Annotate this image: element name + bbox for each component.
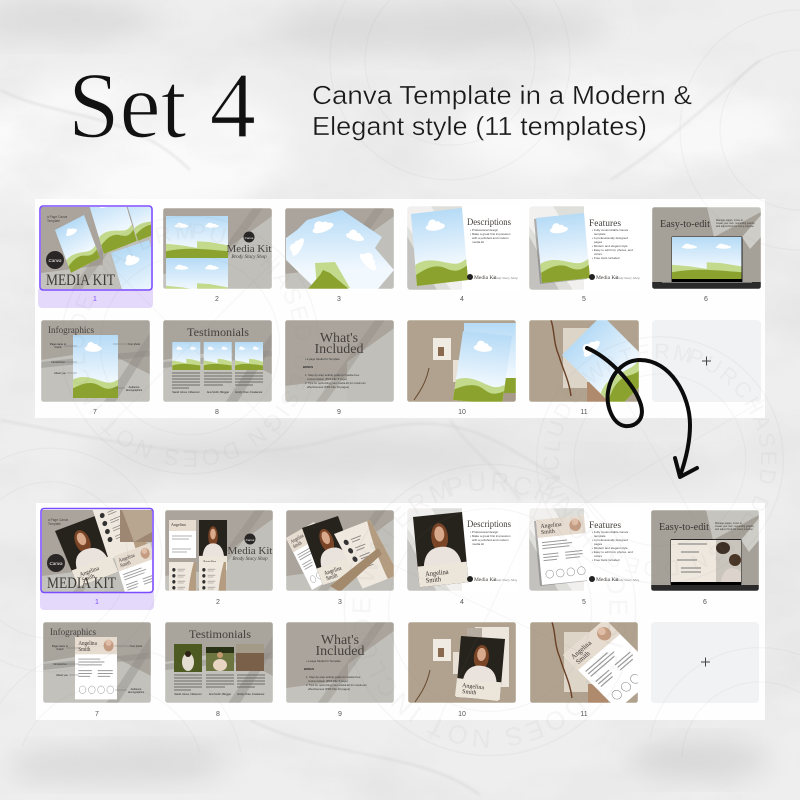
slide 9: what's included (284, 320, 397, 406)
slide 8: testimonials: Emily Chan, Freelancer (235, 390, 263, 394)
slide 4: descriptions with photo: media kit (472, 542, 484, 546)
slide 7: infographics: Introduction (51, 360, 65, 364)
panel: placeholder template grid (35, 185, 765, 418)
slide 2: media kit pages: Canva (245, 236, 254, 240)
number 5: 5 (582, 599, 586, 606)
slide 5: features with resume card (528, 508, 640, 592)
slide 7: infographics with resume: demographics (128, 690, 145, 694)
slide 4: descriptions with photo: • Make a great first impression (470, 534, 511, 538)
slide 9: what's included: effectiveness (PDF File 10 pages) (308, 687, 350, 691)
slide 5: features: • Fully customizable Canva (592, 228, 628, 232)
number 3: 3 (337, 296, 341, 303)
slide 5: features with resume card: colors (594, 554, 603, 558)
slide 6: easy to edit laptop (652, 206, 762, 290)
slide 9: what's included: customization (PDF File 3 page) (308, 679, 348, 683)
slide 4: descriptions with photo: Media Kit (474, 577, 497, 583)
slide 4: descriptions with photo: Brody Stacy Shop (493, 578, 518, 582)
slide 5: features with resume card: • A professionally designed (592, 538, 628, 542)
slide 2: media kit pages with photo: Angelina (171, 522, 186, 527)
slide 7: infographics (40, 320, 153, 406)
slide 8: testimonials: Ana Smith, Blogger (207, 390, 229, 394)
slide 7: infographics with resume: Your photo (130, 644, 143, 648)
slide 7: infographics: Audience (129, 385, 140, 389)
slide 2: media kit pages: Brody Stacy Shop (231, 255, 267, 260)
slide 4: descriptions (406, 206, 518, 290)
slide 10: sand flat lay with photo (408, 622, 520, 708)
slide 10: sand flat lay with photo: Smith (462, 689, 477, 696)
slide 5: features: Media Kit (596, 275, 619, 281)
slide 5: features: • Modern and elegant style (592, 244, 628, 248)
slide 1: media kit cover with photo: MEDIA KIT (47, 575, 116, 592)
add-page tile (652, 320, 761, 402)
slide 4: descriptions: • Professional design (470, 228, 498, 232)
slide 4: descriptions: Brody Stacy Shop (493, 276, 518, 280)
slide 9: what's included: • a page Media Kit Template (306, 659, 341, 663)
slide 11: tilted card (528, 315, 657, 410)
slide 11: tilted resume (530, 619, 660, 710)
slide 4: descriptions: Descriptions (467, 218, 511, 228)
title: Set 4 (68, 54, 256, 158)
slide 7: infographics: Page name or (50, 342, 66, 346)
slide 4: descriptions: with a polished and modern (472, 236, 509, 240)
slide 5: features with resume card: • Free fonts included (592, 558, 620, 562)
slide 9: what's included: BONUS (304, 667, 314, 671)
slide 2: media kit pages: Media Kit (227, 243, 271, 255)
slide 5: features: Features (589, 219, 621, 229)
slide 8: testimonials with photos: Ana Smith, Blogger (209, 692, 231, 696)
slide 5: features: • Easy to edit font, photos, and (592, 248, 633, 252)
slide 9: what's included: Included (315, 342, 363, 357)
number 6: 6 (704, 296, 708, 303)
number 1: 1 (93, 296, 97, 303)
slide 1: media kit cover with photo (41, 492, 167, 612)
subtitle: Canva Template in a Modern & (312, 80, 692, 110)
slide 9: what's included: 1. Step-by-step setting guide for hassle-free (305, 373, 360, 377)
slide 6: laptop with page (650, 510, 760, 592)
slide 7: infographics with resume (42, 622, 155, 708)
slide 1: media kit cover with photo: a Page Canva (48, 518, 68, 522)
slide 6: easy to edit laptop: Easy-to-edit (660, 219, 710, 230)
slide 5: features: • A professionally designed (592, 236, 628, 240)
slide 9: what's included: 2. Tips for optimizing your media kit for maximum (306, 683, 367, 687)
slide 2: media kit pages with photo: Brody Stacy Shop (232, 557, 268, 562)
number 8: 8 (216, 711, 220, 718)
slide 7: infographics with resume: Page name or (52, 644, 68, 648)
number 8: 8 (215, 409, 219, 416)
slide 1: media kit cover: Template (47, 219, 60, 223)
slide 6: laptop with page: create your own, rewording graphs, (715, 525, 754, 528)
slide 1: media kit cover (40, 185, 171, 318)
number 7: 7 (95, 711, 99, 718)
number 10: 10 (458, 711, 466, 718)
slide 7: infographics with resume: Introduction (53, 662, 67, 666)
slide 5: features: • Free fonts included (592, 256, 620, 260)
slide 7: infographics: Infographics (48, 325, 95, 335)
slide 9: what's included (286, 622, 398, 708)
number 1: 1 (95, 599, 99, 606)
slide 9: what's included: • a page Media Kit Template (305, 357, 340, 361)
number 4: 4 (460, 599, 464, 606)
slide 7: infographics with resume: Infographics (50, 627, 97, 637)
slide 10: sand flat lay with photo: Angelina (462, 683, 485, 691)
arrow: curled arrow from placeholder grid to finished grid (587, 348, 697, 477)
slide 6: easy to edit laptop: Manage pages, move to (716, 219, 743, 222)
slide 5: features with resume card: Brody Stacy Shop (615, 578, 640, 582)
selected tab highlight (38, 289, 153, 308)
slide 2: media kit pages with photo: Media Kit (228, 545, 272, 557)
slide 9: what's included: effectiveness (PDF File 10 pages) (307, 385, 349, 389)
slide 5: features: pages (594, 240, 603, 244)
number 6: 6 (703, 599, 707, 606)
add-page tile (651, 622, 759, 703)
panel: finished template grid (36, 492, 765, 720)
subtitle: Elegant style (11 templates) (312, 111, 647, 141)
number 11: 11 (580, 409, 588, 416)
slide 8: testimonials (162, 320, 275, 406)
selected tab highlight (40, 592, 154, 610)
slide 4: descriptions with photo: Descriptions (467, 520, 511, 530)
slide 1: media kit cover: a Page Canva (47, 215, 67, 219)
slide 9: what's included: customization (PDF File 3 page) (307, 377, 347, 381)
slide 5: features with resume card: pages (594, 542, 603, 546)
slide 4: descriptions with photo: • Professional design (470, 530, 498, 534)
slide 7: infographics: About you (54, 371, 66, 375)
slide 5: features: colors (594, 252, 603, 256)
slide 5: features with resume card: • Fully customizable Canva (592, 530, 628, 534)
slide 10: sand flat lay (406, 320, 519, 406)
slide 1: media kit cover with photo: Template (48, 522, 61, 526)
slide 5: features (528, 206, 640, 290)
slide 4: descriptions: Media Kit (474, 275, 497, 281)
slide 8: testimonials with photos: Emily Chan, Freelancer (237, 692, 265, 696)
slide 8: testimonials: Sarah Jones, Influencer (172, 390, 200, 394)
slide 2: media kit pages with photo (164, 510, 277, 601)
number 10: 10 (458, 409, 466, 416)
number 2: 2 (216, 599, 220, 606)
slide 9: what's included: Included (316, 644, 364, 659)
slide 1: media kit cover: Canva (48, 258, 62, 263)
number 4: 4 (460, 296, 464, 303)
slide 7: infographics: Your photo (128, 342, 141, 346)
slide 4: descriptions: • Make a great first impression (470, 232, 511, 236)
slide 7: infographics with resume: Audience (131, 687, 142, 691)
slide 6: laptop with page: Manage pages, move to (715, 522, 742, 525)
number 11: 11 (580, 711, 588, 718)
slide 3: scattered photo cards (286, 510, 399, 596)
slide 5: features with resume card: Media Kit (596, 577, 619, 583)
slide 2: media kit pages (162, 208, 275, 300)
slide 9: what's included: 1. Step-by-step setting guide for hassle-free (306, 675, 361, 679)
slide 6: laptop with page: and adjust fonts for every purpose (715, 528, 753, 531)
number 3: 3 (338, 599, 342, 606)
slide 5: features with resume card: • Modern and elegant style (592, 546, 628, 550)
slide 6: easy to edit laptop: create your own, rewording graphs, (716, 222, 755, 225)
slide 4: descriptions with photo (406, 508, 518, 592)
slide 4: descriptions with photo: with a polished and modern (472, 538, 509, 542)
slide 5: features: template (594, 232, 606, 236)
slide 5: features: Brody Stacy Shop (615, 276, 640, 280)
slide 9: what's included: What's (320, 331, 358, 346)
slide 9: what's included: 2. Tips for optimizing your media kit for maximum (305, 381, 366, 385)
slide 2: media kit pages with photo: Canva (246, 538, 255, 542)
number 5: 5 (582, 296, 586, 303)
slide 9: what's included: What's (321, 633, 359, 648)
slide 8: testimonials: Testimonials (187, 327, 250, 339)
slide 7: infographics with resume: brand (57, 647, 64, 651)
slide 3: scattered cards (284, 208, 397, 294)
slide 4: descriptions: media kit (472, 240, 484, 244)
number 2: 2 (215, 296, 219, 303)
slide 5: features with resume card: Features (589, 521, 621, 531)
slide 6: easy to edit laptop: and adjust fonts for every purpose (716, 225, 754, 228)
slide 7: infographics: demographics (126, 388, 143, 392)
slide 7: infographics: brand (55, 345, 62, 349)
slide 8: testimonials with photos: Testimonials (189, 629, 252, 641)
slide 8: testimonials with photos (164, 622, 277, 708)
slide 6: laptop with page: Easy-to-edit (659, 522, 709, 533)
number 9: 9 (337, 409, 341, 416)
slide 1: media kit cover: MEDIA KIT (46, 272, 115, 289)
slide 5: features with resume card: • Easy to edit font, photos, and (592, 550, 633, 554)
slide 8: testimonials with photos: Sarah Jones, Influencer (174, 692, 202, 696)
number 7: 7 (93, 409, 97, 416)
slide 5: features with resume card: template (594, 534, 606, 538)
number 9: 9 (338, 711, 342, 718)
slide 7: infographics with resume: About you (56, 673, 68, 677)
slide 1: media kit cover with photo: Canva (49, 561, 63, 566)
slide 9: what's included: BONUS (303, 365, 313, 369)
